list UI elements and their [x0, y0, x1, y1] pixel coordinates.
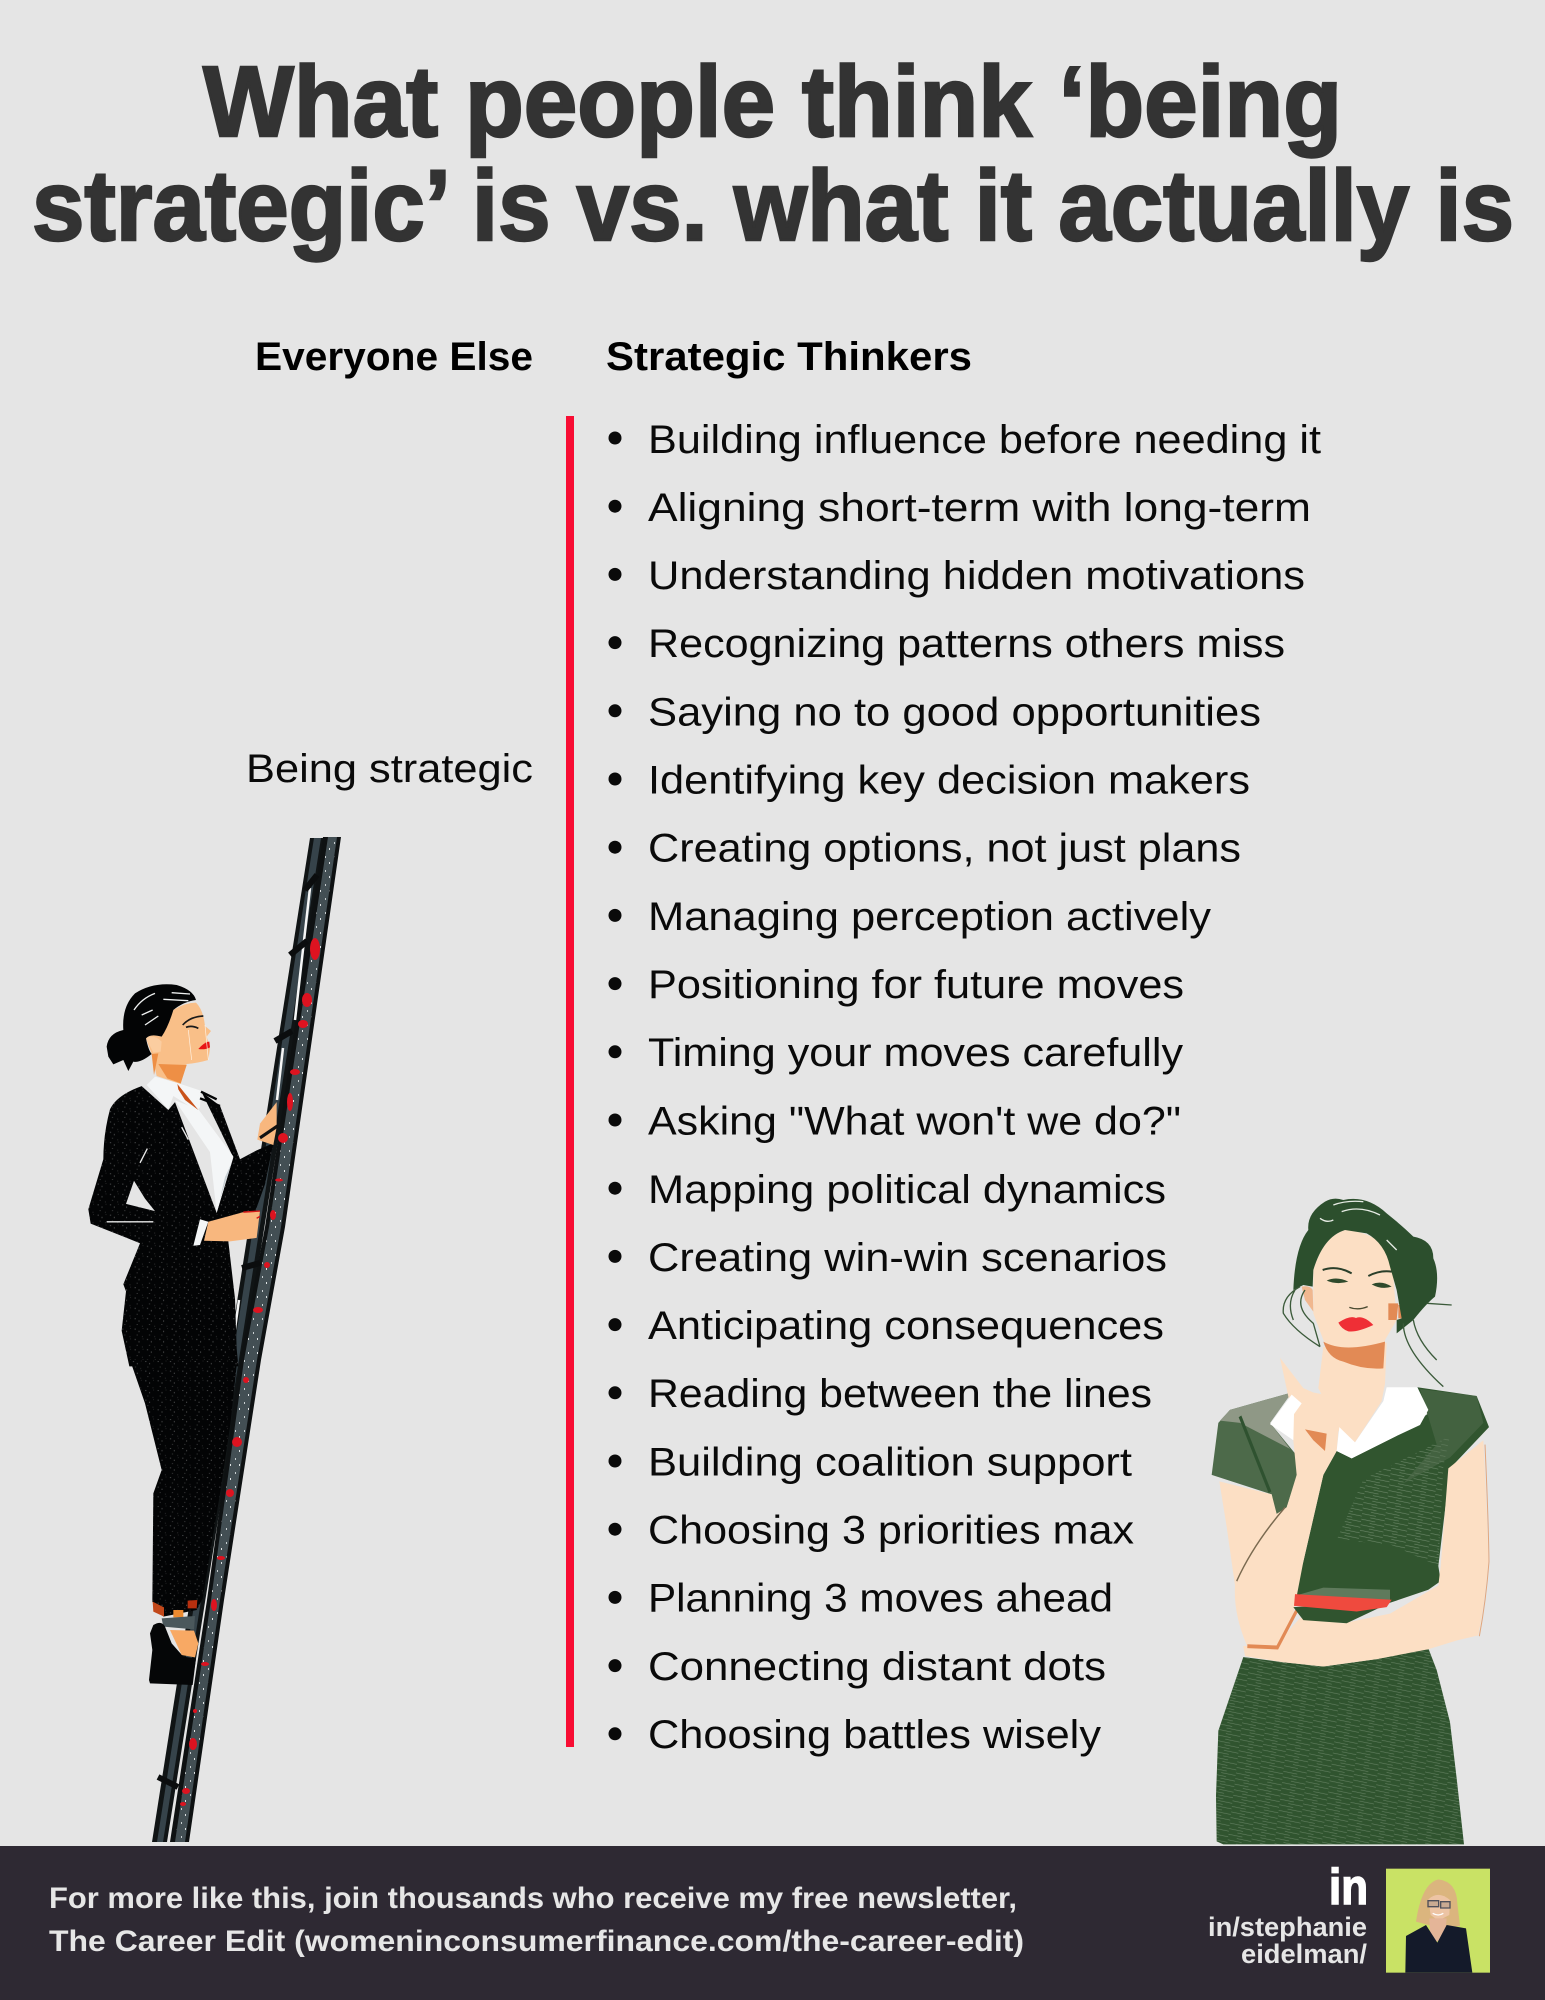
- strategic thinkers list: [608, 418, 1321, 1757]
- shirt: [175, 1100, 233, 1213]
- strategic thinkers list: Creating options, not just plans: [648, 826, 1241, 870]
- strategic thinkers list: Building coalition support: [648, 1440, 1132, 1484]
- strategic thinkers list: Positioning for future moves: [648, 963, 1184, 1007]
- head: [1283, 1199, 1452, 1387]
- illustration: woman with raised finger: [1212, 1199, 1489, 1844]
- body: [1212, 1343, 1489, 1844]
- footer bar: [0, 1846, 1545, 2000]
- ladder: [152, 837, 341, 1842]
- label: being strategic: Being strategic: [246, 747, 533, 791]
- hand on rung: [257, 1102, 277, 1145]
- neck: [1318, 1343, 1387, 1442]
- red divider line: [566, 416, 574, 1747]
- footer newsletter text: The Career Edit (womeninconsumerfinance.com/the-career-edit): [49, 1925, 1024, 1958]
- icon: linkedin: in: [1329, 1859, 1368, 1915]
- strategic thinkers list: Connecting distant dots: [648, 1645, 1106, 1689]
- strategic thinkers list: Saying no to good opportunities: [648, 690, 1261, 734]
- suit jacket and trousers: [88, 1086, 273, 1366]
- strategic thinkers list: Creating win-win scenarios: [648, 1236, 1167, 1280]
- white collar: [1337, 1387, 1428, 1458]
- strategic thinkers list: Choosing 3 priorities max: [648, 1508, 1134, 1552]
- arm shading: [1247, 1609, 1297, 1647]
- strategic thinkers list: Reading between the lines: [648, 1372, 1152, 1416]
- woman lower body and shoe: [130, 1360, 237, 1685]
- footer newsletter text: For more like this, join thousands who receive my free newsletter,: [49, 1882, 1017, 1915]
- column heading: everyone else: Everyone Else: [255, 335, 533, 379]
- strategic thinkers list: Planning 3 moves ahead: [648, 1576, 1113, 1620]
- linkedin handle: eidelman/: [1241, 1939, 1368, 1969]
- author photo: [1386, 1869, 1490, 1973]
- belt: [1293, 1603, 1390, 1623]
- shoulder sheen: [1403, 1389, 1483, 1484]
- strategic thinkers list: Recognizing patterns others miss: [648, 622, 1285, 666]
- sleeve highlights: [107, 1127, 188, 1222]
- footer newsletter text: [49, 1882, 1024, 1958]
- strategic thinkers list: Building influence before needing it: [648, 418, 1321, 462]
- head of climbing woman: [107, 984, 220, 1111]
- strategic thinkers list: Timing your moves carefully: [648, 1031, 1183, 1075]
- title: [32, 46, 1514, 262]
- strategic thinkers list: Aligning short-term with long-term: [648, 486, 1311, 530]
- strategic thinkers list: Asking "What won't we do?": [648, 1100, 1181, 1144]
- linkedin handle: in/stephanie: [1208, 1912, 1367, 1942]
- linkedin handle: [1208, 1912, 1368, 1969]
- arm gap: [126, 1181, 155, 1211]
- strategic thinkers list: Understanding hidden motivations: [648, 554, 1305, 598]
- strategic thinkers list: Identifying key decision makers: [648, 758, 1250, 802]
- raised forearm and hand: [1219, 1358, 1348, 1648]
- left sleeve: [1212, 1392, 1298, 1515]
- illustration: woman climbing ladder: [88, 837, 341, 1842]
- woman upper body: [88, 1086, 278, 1366]
- column heading: strategic thinkers: Strategic Thinkers: [606, 335, 972, 379]
- title: What people think ‘being: [203, 46, 1342, 158]
- folded arm: [1243, 1440, 1488, 1667]
- skirt: [1216, 1648, 1464, 1844]
- strategic thinkers list: Mapping political dynamics: [648, 1168, 1166, 1212]
- strategic thinkers list: Managing perception actively: [648, 895, 1211, 939]
- bodice: [1293, 1387, 1489, 1603]
- cuff and lower hand: [193, 1219, 208, 1246]
- strategic thinkers list: Choosing battles wisely: [648, 1713, 1101, 1757]
- strategic thinkers list: Anticipating consequences: [648, 1304, 1164, 1348]
